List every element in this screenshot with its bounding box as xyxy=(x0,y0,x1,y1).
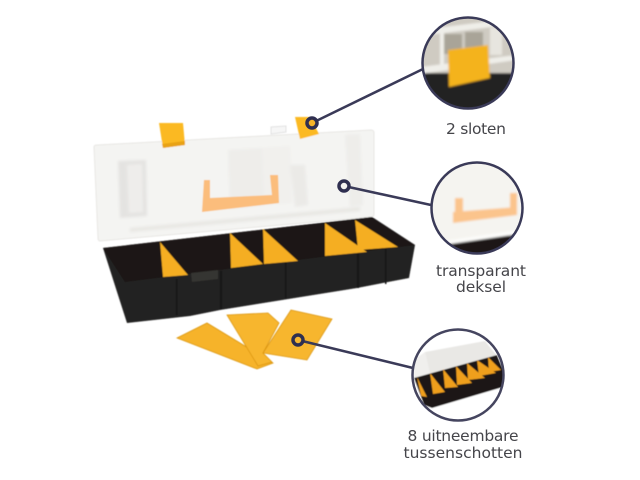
label: 8 uitneembare tussenschotten xyxy=(404,427,522,462)
hinge tab on lid xyxy=(271,126,286,134)
left yellow latch xyxy=(159,123,185,148)
label: transparant deksel: transparant xyxy=(436,262,526,280)
label: transparant deksel xyxy=(436,262,526,296)
callout: dividers detail xyxy=(410,327,506,423)
loose yellow dividers xyxy=(177,310,332,369)
orange handle seen through lid xyxy=(202,175,279,212)
callout: latch detail xyxy=(420,15,516,111)
callout line: lid xyxy=(339,181,431,205)
black tray body xyxy=(103,217,415,323)
transparent lid xyxy=(94,130,374,241)
label: 8 uitneembare tussenschotten: tussenschotten xyxy=(404,444,522,462)
callout: lid detail xyxy=(430,160,526,260)
label: transparant deksel: deksel xyxy=(456,278,506,296)
label: 8 uitneembare tussenschotten: 8 uitneembare xyxy=(408,427,518,445)
product: open storage box xyxy=(94,117,415,369)
label: 2 sloten: 2 sloten xyxy=(446,120,506,138)
tray dividers xyxy=(160,220,398,277)
callout line: dividers xyxy=(293,335,413,368)
right yellow latch xyxy=(295,117,319,139)
callout line: latches xyxy=(307,69,423,128)
